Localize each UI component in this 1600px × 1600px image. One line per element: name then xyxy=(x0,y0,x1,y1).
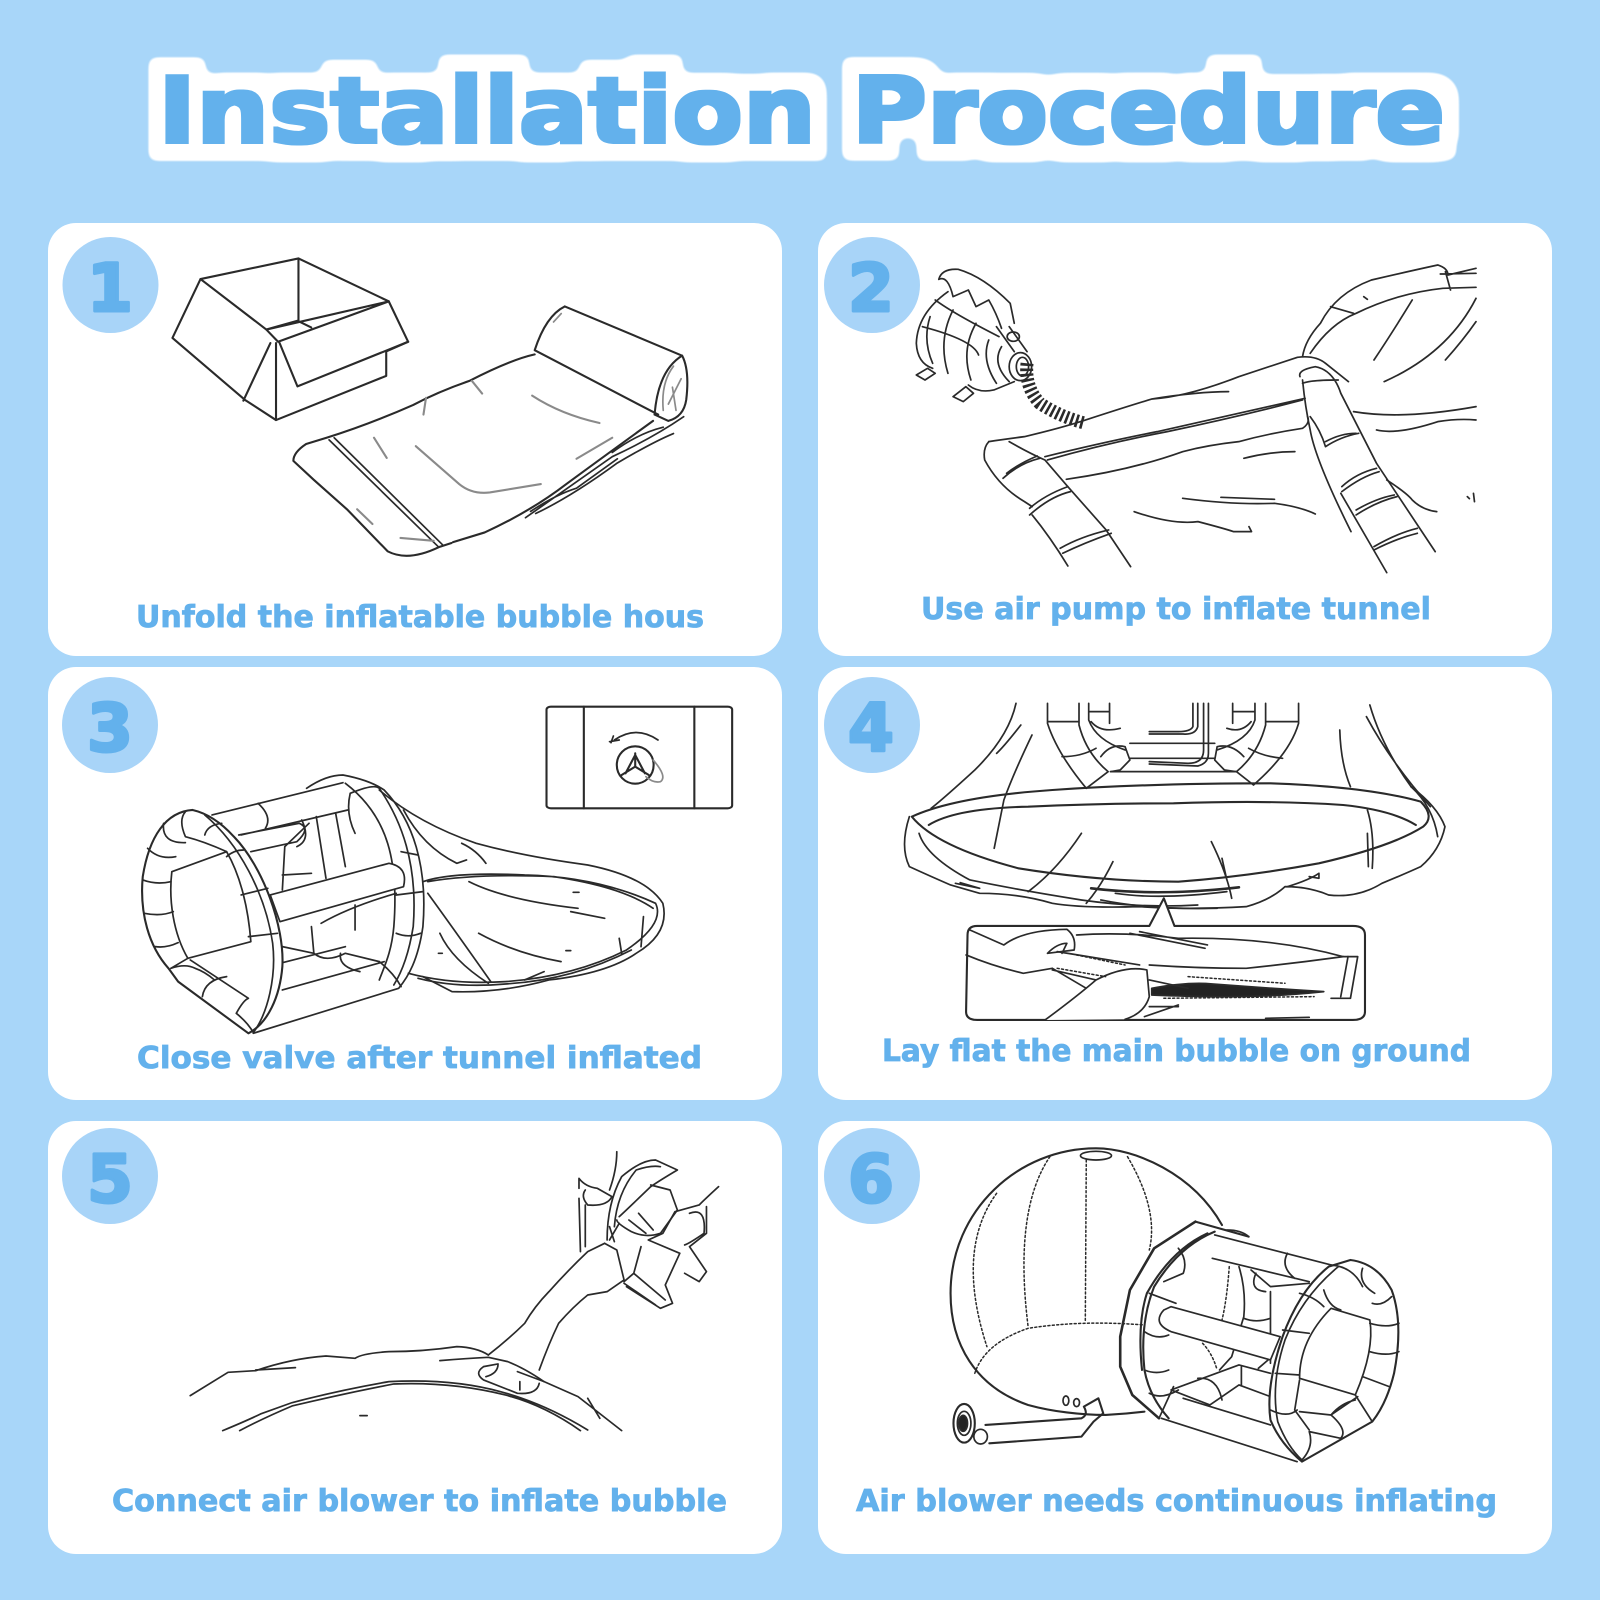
number badge 6 xyxy=(824,1128,920,1224)
number badge 1: 1 xyxy=(87,250,133,327)
illustration: inflated tunnel with bag xyxy=(142,707,732,1033)
title: Installation Procedure xyxy=(158,59,1445,164)
illustration: inflated bubble, tunnel and blower xyxy=(951,1148,1399,1462)
panel: step 2 air pump xyxy=(818,223,1552,656)
illustration: air pump and tunnel xyxy=(916,265,1476,573)
number badge 4: 4 xyxy=(848,690,894,767)
number badge 3 xyxy=(62,677,158,773)
panel: step 3 close valve xyxy=(48,667,782,1100)
number badge 1 xyxy=(62,237,158,333)
illustration: hand connecting air blower xyxy=(190,1152,719,1431)
caption 2: Use air pump to inflate tunnel xyxy=(921,592,1431,627)
panel: step 4 lay flat xyxy=(818,667,1552,1100)
card 5 xyxy=(48,1121,782,1554)
card 6 xyxy=(818,1121,1552,1554)
card 2 xyxy=(818,223,1552,656)
caption 5: Connect air blower to inflate bubble xyxy=(112,1484,727,1519)
caption 4: Lay flat the main bubble on ground xyxy=(882,1034,1471,1069)
number badge 6: 6 xyxy=(848,1141,894,1218)
panel: step 1 unfold xyxy=(48,223,782,656)
card 1 xyxy=(48,223,782,656)
number badge 5: 5 xyxy=(87,1141,133,1218)
caption 6: Air blower needs continuous inflating xyxy=(856,1484,1497,1519)
number badge 2: 2 xyxy=(848,250,894,327)
number badge 5 xyxy=(62,1128,158,1224)
card 3 xyxy=(48,667,782,1100)
number badge 2 xyxy=(824,237,920,333)
caption 1: Unfold the inflatable bubble hous xyxy=(136,600,704,635)
panel: step 6 continuous inflating xyxy=(818,1121,1552,1554)
caption 3: Close valve after tunnel inflated xyxy=(137,1041,702,1076)
panel: step 5 connect blower xyxy=(48,1121,782,1554)
illustration: open box and rolled bubble xyxy=(172,258,687,556)
number badge 4 xyxy=(824,677,920,773)
card 4 xyxy=(818,667,1552,1100)
number badge 3: 3 xyxy=(87,690,133,767)
illustration: flat bubble and zipper detail xyxy=(905,703,1445,1020)
